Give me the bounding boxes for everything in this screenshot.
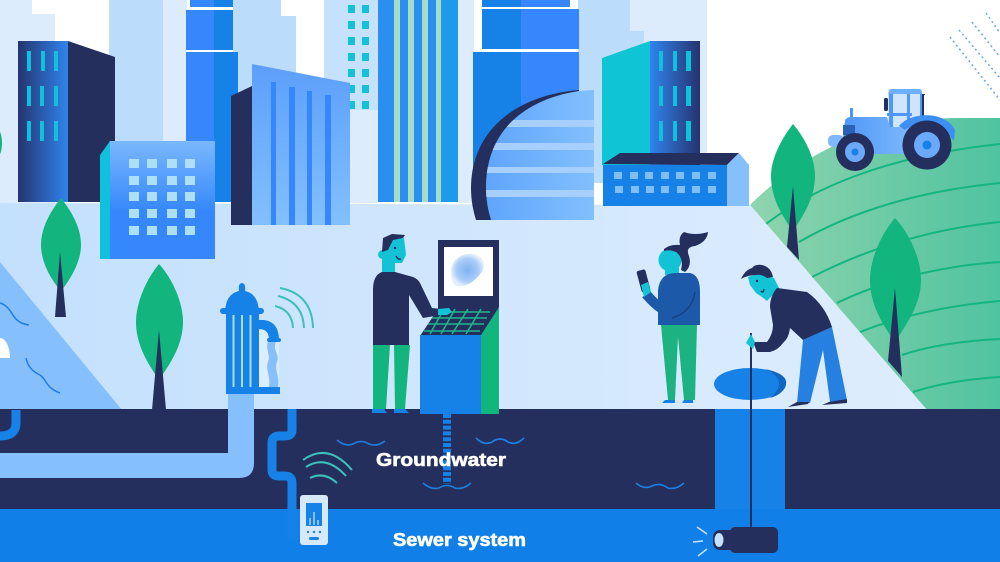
well pipe	[443, 414, 451, 484]
ground plane	[0, 203, 927, 410]
water pipe	[0, 394, 254, 478]
far skyline	[0, 0, 707, 205]
building: cube with windows	[100, 141, 215, 259]
manhole shaft	[715, 409, 785, 509]
groundwater waves	[337, 438, 684, 488]
tree: hill upper	[771, 124, 815, 260]
building: blue tower centre	[473, 0, 579, 202]
thin pipe left	[0, 410, 16, 436]
building: blue tower left	[186, 0, 238, 202]
dotted rain lines	[950, 13, 1000, 100]
building: teal tower right	[602, 41, 700, 165]
tree: left large	[136, 264, 183, 410]
manhole	[714, 368, 786, 400]
sewer layer	[0, 509, 1000, 562]
sensor pipe	[272, 409, 292, 540]
icon: sewer camera	[693, 527, 778, 556]
tractor	[828, 89, 955, 171]
tree: hill lower	[870, 218, 921, 377]
label: Groundwater: Groundwater	[376, 450, 506, 470]
windows: teal grid behind	[348, 5, 369, 109]
hydrant with wireless signal	[220, 283, 313, 394]
building: ribbed block	[231, 64, 350, 225]
tree: edge	[0, 129, 2, 157]
tree: left small	[41, 198, 81, 317]
kiosk	[420, 240, 499, 414]
inspection cable	[750, 333, 752, 530]
building: dark tower left	[18, 41, 115, 202]
hill	[750, 118, 1000, 410]
icon: phone sensor	[300, 495, 328, 545]
person: woman with phone	[636, 232, 708, 403]
building: striped tower	[378, 0, 458, 202]
label: Sewer system: Sewer system	[393, 530, 526, 550]
person: man at kiosk	[372, 234, 452, 413]
river	[0, 262, 122, 410]
building: dome	[471, 90, 594, 220]
person: man at manhole	[741, 265, 847, 407]
groundwater layer	[0, 409, 1000, 509]
building: low hall	[603, 153, 749, 206]
icon: signal above phone	[303, 453, 352, 483]
